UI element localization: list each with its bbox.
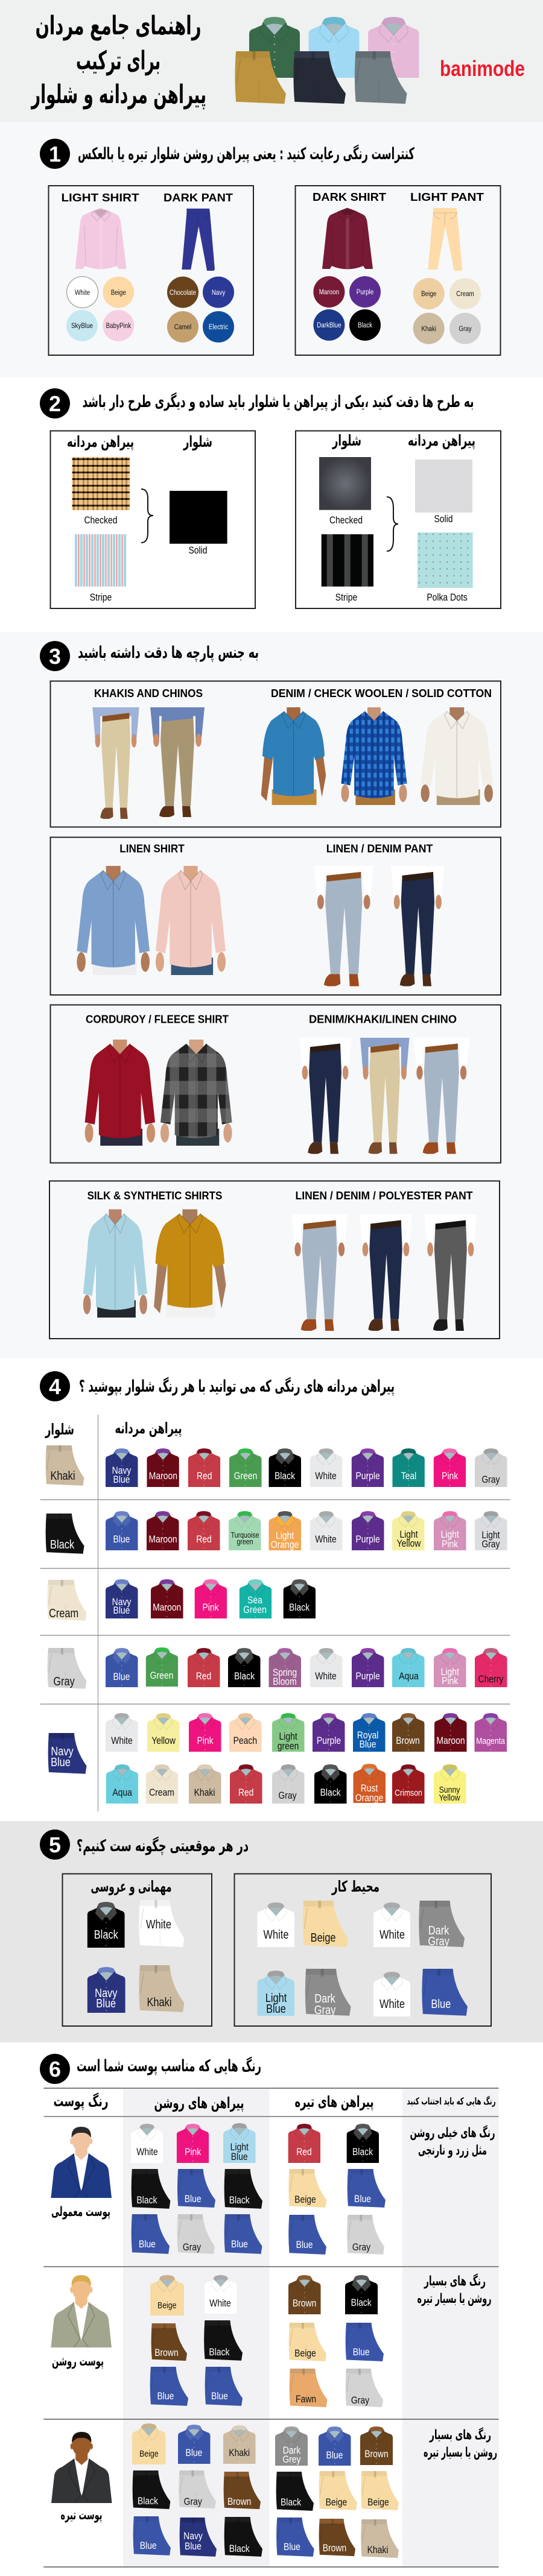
row: khaki: Purple bbox=[355, 1471, 380, 1482]
step 5 heading: 5 bbox=[49, 1833, 61, 1857]
swatch: solid: Solid bbox=[189, 545, 207, 556]
label: normal skin: پوست معمولی bbox=[51, 2205, 110, 2220]
row: black: Blue bbox=[113, 1534, 130, 1545]
dark shirt options: Blue bbox=[353, 2347, 370, 2358]
swatches: light pant colors: Beige bbox=[421, 290, 436, 298]
dark shirt options bbox=[288, 2124, 386, 2255]
panel: workplace bbox=[234, 1874, 491, 2026]
photo: light blue silk shirt bbox=[83, 1210, 147, 1318]
colors to avoid: مثل زرد و نارنجی bbox=[418, 2143, 487, 2158]
photo: gray check shirt bbox=[160, 1040, 232, 1146]
row: black: Red bbox=[196, 1534, 212, 1545]
label: pant: شلوار bbox=[332, 432, 361, 450]
row: gray: Purple bbox=[355, 1671, 380, 1682]
row: khaki: Gray bbox=[481, 1474, 500, 1485]
photo: chino pants bbox=[150, 707, 205, 818]
row: gray: Cherry bbox=[478, 1674, 504, 1685]
row: navy blue: Khaki bbox=[194, 1787, 215, 1798]
step 3 heading bbox=[40, 641, 259, 671]
photo: linen pant bbox=[314, 866, 373, 987]
outfit: white shirt blue pant: White bbox=[379, 1997, 405, 2010]
row: black bbox=[46, 1511, 507, 1554]
label: linen denim polyester: LINEN / DENIM / POLYESTER PANT bbox=[296, 1190, 473, 1202]
panel: khakis and denim bbox=[51, 681, 501, 827]
icon: pink shirt bbox=[75, 208, 127, 270]
row: dark skin bbox=[51, 2423, 497, 2558]
light shirt options: Blue bbox=[231, 2151, 248, 2162]
row: black: Pink bbox=[442, 1539, 458, 1550]
column heading: shirt: پیراهن مردانه bbox=[115, 1419, 182, 1438]
title bbox=[31, 11, 206, 110]
step 4 heading bbox=[40, 1371, 395, 1401]
row: khaki: Blue bbox=[113, 1474, 130, 1485]
panel: linen bbox=[51, 837, 501, 995]
chart: shirt and pant pairing table bbox=[40, 1415, 510, 1811]
row: gray: Gray bbox=[53, 1674, 75, 1688]
row: navy blue: Peach bbox=[233, 1735, 257, 1746]
outfit: white shirt beige pant: Beige bbox=[311, 1930, 336, 1944]
photo: gold silk shirt bbox=[154, 1210, 226, 1318]
brace bbox=[387, 497, 398, 551]
row: black: Orange bbox=[271, 1539, 299, 1550]
photo: white shirt bbox=[421, 707, 493, 805]
light shirt options: Blue bbox=[185, 2541, 202, 2552]
step 5 heading: در هر موقعیتی چگونه ست کنیم؟ bbox=[77, 1836, 249, 1855]
dark shirt options: Blue bbox=[326, 2450, 343, 2461]
light shirt options: Beige bbox=[157, 2300, 177, 2310]
step 4 heading: 4 bbox=[49, 1374, 61, 1399]
label: light shirt: LIGHT SHIRT bbox=[62, 192, 139, 204]
colors to avoid bbox=[424, 2426, 497, 2460]
row: navy blue: Red bbox=[238, 1787, 253, 1798]
column heading: colors to avoid: رنگ هایی که باید اجتناب کنید bbox=[407, 2095, 496, 2107]
swatches: light pant colors: Gray bbox=[459, 325, 472, 333]
logo: banimode: banimode bbox=[440, 56, 525, 81]
row: navy blue: Orange bbox=[355, 1793, 383, 1804]
outfit: white shirt blue pant: Blue bbox=[431, 1997, 451, 2010]
row: gray: White bbox=[315, 1671, 337, 1682]
row: khaki: Black bbox=[275, 1471, 295, 1482]
label: silk: SILK & SYNTHETIC SHIRTS bbox=[87, 1190, 222, 1202]
row: navy blue: Gray bbox=[278, 1790, 297, 1801]
row: navy blue: Crimson bbox=[395, 1788, 422, 1798]
person: dark skin bbox=[51, 2432, 112, 2503]
outfit: white shirt blue pant bbox=[373, 1969, 468, 2016]
row: navy blue: Rust bbox=[361, 1783, 378, 1794]
photo: blue linen shirt bbox=[77, 866, 150, 975]
step 6 heading bbox=[40, 2054, 261, 2084]
row: navy blue: Maroon bbox=[436, 1735, 465, 1746]
panel: light shirt dark pant bbox=[48, 186, 253, 355]
row: normal skin bbox=[51, 2123, 495, 2255]
dark shirt options: Blue bbox=[354, 2194, 371, 2205]
photo: denim pant bbox=[360, 1214, 412, 1331]
swatch: checked bbox=[72, 457, 130, 526]
photo: check shirt bbox=[341, 707, 407, 805]
photo: linen chino bbox=[413, 1038, 469, 1154]
row: black: Gray bbox=[481, 1539, 500, 1550]
row: navy blue: Sunny bbox=[439, 1785, 460, 1795]
light shirt options: Black bbox=[138, 2496, 158, 2507]
row: black: green bbox=[237, 1537, 253, 1546]
outfit: white shirt dark gray pant: Gray bbox=[428, 1934, 450, 1948]
row: black: Black bbox=[50, 1537, 75, 1551]
swatch: stripe bbox=[75, 534, 127, 603]
row: black: White bbox=[315, 1534, 337, 1545]
swatches: dark shirt colors: Purple bbox=[357, 288, 373, 296]
panel: patterned shirt solid pant bbox=[51, 431, 255, 608]
dark shirt options: Brown bbox=[293, 2298, 316, 2309]
row: khaki bbox=[46, 1445, 507, 1487]
section background: skin tone bbox=[0, 2042, 543, 2576]
dark shirt options: Beige bbox=[326, 2497, 347, 2508]
row: gray: Red bbox=[196, 1671, 211, 1682]
row: khaki: Khaki bbox=[51, 1468, 75, 1482]
title: پیراهن مردانه و شلوار bbox=[31, 80, 206, 110]
step 2 heading bbox=[40, 388, 474, 418]
row: gray: Aqua bbox=[399, 1671, 419, 1682]
step 3 heading: به جنس پارچه ها دقت داشته باشید bbox=[78, 643, 259, 662]
colors to avoid bbox=[410, 2124, 495, 2158]
section background: header bbox=[0, 0, 543, 122]
label: dark skin: پوست تیره bbox=[60, 2508, 103, 2523]
row: black: Light bbox=[276, 1530, 294, 1541]
row: cream: Maroon bbox=[153, 1602, 181, 1613]
row: navy blue: Royal bbox=[357, 1730, 378, 1741]
light shirt options: White bbox=[209, 2298, 231, 2309]
outfit: white shirt beige pant bbox=[257, 1901, 348, 1947]
section background: fabric bbox=[0, 632, 543, 1358]
label: party: مهمانی و عروسی bbox=[91, 1878, 171, 1896]
row: cream: Sea bbox=[247, 1595, 262, 1606]
dark shirt options: Khaki bbox=[367, 2545, 388, 2555]
dark shirt options: Brown bbox=[364, 2449, 389, 2460]
row: khaki: Navy bbox=[112, 1465, 132, 1476]
title: راهنمای جامع مردان bbox=[35, 11, 202, 41]
light shirt options: Gray bbox=[183, 2242, 201, 2253]
swatch: dark checked: Checked bbox=[329, 515, 363, 526]
step 6 heading: رنگ هایی که مناسب پوست شما است bbox=[77, 2056, 261, 2076]
light shirt options: Blue bbox=[231, 2239, 248, 2250]
light shirt options bbox=[132, 2423, 262, 2557]
light shirt options: Light bbox=[230, 2142, 249, 2153]
swatches: dark pant colors: Navy bbox=[212, 289, 226, 297]
dark shirt options bbox=[288, 2275, 384, 2407]
photo: pink linen shirt bbox=[156, 866, 226, 975]
colors to avoid bbox=[418, 2273, 491, 2306]
step 1 heading: 1 bbox=[49, 142, 61, 166]
header garments illustration bbox=[235, 17, 419, 104]
label: denim khaki linen: DENIM/KHAKI/LINEN CHINO bbox=[309, 1013, 457, 1025]
swatch: dark stripe: Stripe bbox=[335, 592, 357, 603]
step 6 heading: 6 bbox=[49, 2057, 61, 2082]
row: gray: Green bbox=[150, 1670, 173, 1681]
outfit: light blue shirt dark gray pant: Gray bbox=[314, 2003, 336, 2016]
swatch: solid gray bbox=[415, 459, 472, 525]
dark shirt options: Black bbox=[352, 2147, 373, 2158]
label: light pant: LIGHT PANT bbox=[410, 191, 484, 203]
light shirt options: Black bbox=[229, 2195, 250, 2206]
outfit: black shirt white pant bbox=[87, 1900, 184, 1948]
row: navy blue: Yellow bbox=[439, 1793, 460, 1802]
label: pant: شلوار bbox=[183, 433, 212, 451]
swatch: checked: Checked bbox=[84, 515, 117, 526]
swatch: stripe: Stripe bbox=[90, 592, 112, 603]
row: cream: Pink bbox=[202, 1602, 219, 1613]
outfit: light blue shirt dark gray pant: Light bbox=[265, 1990, 287, 2004]
row: cream: Green bbox=[243, 1605, 267, 1615]
dark shirt options: Beige bbox=[294, 2194, 316, 2205]
light shirt options: Beige bbox=[139, 2449, 159, 2458]
outfit: white shirt dark gray pant: White bbox=[379, 1927, 405, 1941]
person: normal skin bbox=[51, 2127, 112, 2198]
row: black: Light bbox=[399, 1529, 418, 1540]
dark shirt options: Fawn bbox=[296, 2394, 316, 2405]
row: navy blue bbox=[48, 1713, 507, 1804]
light shirt options: Brown bbox=[227, 2496, 251, 2507]
outfit: white shirt dark gray pant bbox=[373, 1901, 465, 1948]
colors to avoid: رنگ های بسیار bbox=[424, 2273, 486, 2289]
light shirt options bbox=[150, 2275, 243, 2406]
dark shirt options: Black bbox=[351, 2297, 372, 2308]
light shirt options: Blue bbox=[211, 2391, 228, 2402]
photo: polyester pant bbox=[424, 1214, 477, 1331]
column heading: skin color: رنگ پوست bbox=[53, 2092, 109, 2110]
dark shirt options bbox=[275, 2426, 399, 2558]
dark shirt options: Red bbox=[296, 2147, 312, 2158]
dark shirt options: Gray bbox=[352, 2242, 370, 2253]
person: light skin bbox=[51, 2275, 112, 2347]
row: cream: Navy bbox=[112, 1597, 132, 1608]
swatches: light shirt colors: Beige bbox=[111, 289, 126, 297]
light shirt options: Blue bbox=[185, 2194, 202, 2205]
section background: patterns bbox=[0, 377, 543, 632]
outfit: light blue shirt dark gray pant bbox=[257, 1969, 351, 2016]
colors to avoid: رنگ های بسیار bbox=[429, 2426, 491, 2443]
column heading: light shirts: پیراهن های روشن bbox=[154, 2094, 244, 2112]
row: navy blue: Pink bbox=[197, 1735, 214, 1746]
row: navy blue: green bbox=[278, 1741, 299, 1752]
row: light skin bbox=[51, 2273, 491, 2407]
title: برای ترکیب bbox=[76, 46, 160, 76]
step 1 heading bbox=[40, 139, 414, 169]
swatches: light pant colors: Cream bbox=[456, 290, 474, 298]
step 3 heading: 3 bbox=[49, 644, 61, 669]
row: khaki: Maroon bbox=[149, 1471, 177, 1482]
dark shirt options: Blue bbox=[284, 2542, 300, 2552]
swatch: dark stripe bbox=[322, 534, 373, 603]
light shirt options: Pink bbox=[185, 2147, 201, 2158]
outfit: black shirt white pant: Black bbox=[94, 1927, 119, 1941]
row: cream: Cream bbox=[49, 1606, 78, 1620]
dark shirt options: Beige bbox=[367, 2497, 389, 2508]
row: navy blue: Magenta bbox=[476, 1736, 505, 1746]
swatches: light shirt colors: BabyPink bbox=[106, 322, 132, 330]
dark shirt options: Beige bbox=[294, 2348, 316, 2359]
outfit: navy shirt khaki pant: Blue bbox=[96, 1996, 116, 2010]
photo: linen pant bbox=[291, 1214, 348, 1331]
row: navy blue: Blue bbox=[360, 1739, 376, 1750]
row: black: Purple bbox=[355, 1534, 380, 1545]
swatches: light shirt colors bbox=[66, 277, 134, 341]
photo: khaki pants bbox=[92, 707, 139, 819]
photo: khaki chino bbox=[360, 1038, 409, 1154]
light shirt options: Blue bbox=[186, 2448, 202, 2458]
outfit: light blue shirt dark gray pant: Blue bbox=[266, 2001, 286, 2015]
column heading: dark shirts: پیراهن های تیره bbox=[294, 2093, 374, 2111]
row: cream: Blue bbox=[113, 1605, 130, 1616]
step 2 heading: 2 bbox=[49, 391, 61, 416]
row: cream: Black bbox=[289, 1602, 310, 1613]
photo: denim chino bbox=[299, 1038, 351, 1154]
row: black: Light bbox=[441, 1529, 459, 1540]
swatches: dark pant colors: Chocolate bbox=[170, 289, 196, 297]
step 5 heading bbox=[40, 1829, 249, 1860]
label: dark pant: DARK PANT bbox=[164, 192, 233, 204]
label: linen shirt: LINEN SHIRT bbox=[119, 843, 185, 855]
light shirt options: Gray bbox=[184, 2496, 202, 2507]
light shirt options: White bbox=[136, 2147, 158, 2158]
light shirt options: Black bbox=[229, 2543, 250, 2554]
row: gray: Spring bbox=[273, 1667, 297, 1678]
swatch: polka dots: Polka Dots bbox=[427, 592, 468, 603]
label: shirt: پیراهن مردانه bbox=[408, 432, 475, 450]
light shirt options: Black bbox=[136, 2195, 157, 2206]
row: khaki: Pink bbox=[442, 1471, 458, 1482]
row: gray bbox=[48, 1647, 507, 1689]
outfit: black shirt white pant: White bbox=[146, 1917, 171, 1931]
light shirt options: Blue bbox=[157, 2391, 174, 2402]
section background: occasions bbox=[0, 1821, 543, 2042]
row: navy blue: Blue bbox=[51, 1755, 71, 1769]
row: navy blue: Aqua bbox=[112, 1787, 132, 1798]
light shirt options: Black bbox=[209, 2347, 230, 2358]
swatch: solid gray: Solid bbox=[434, 514, 453, 525]
dark shirt options: Blue bbox=[296, 2240, 313, 2250]
swatches: dark shirt colors: Maroon bbox=[319, 288, 339, 296]
icon: beige pant bbox=[428, 208, 462, 271]
outfit: navy shirt khaki pant: Khaki bbox=[147, 1995, 171, 2009]
outfit: white shirt dark gray pant: Dark bbox=[428, 1923, 449, 1937]
colors to avoid: روشن یا بسیار تیره bbox=[418, 2291, 491, 2306]
row: gray: Light bbox=[441, 1667, 459, 1678]
label: dark shirt: DARK SHIRT bbox=[313, 191, 386, 203]
label: denim check cotton: DENIM / CHECK WOOLEN / SOLID COTTON bbox=[271, 687, 492, 699]
panel: patterned pant solid shirt bbox=[296, 431, 501, 608]
row: khaki: White bbox=[315, 1471, 337, 1482]
section background: color pairing bbox=[0, 1358, 543, 1821]
light shirt options: Blue bbox=[140, 2540, 157, 2551]
row: black: Turquoise bbox=[231, 1530, 259, 1539]
row: navy blue: Yellow bbox=[151, 1735, 176, 1746]
swatches: dark pant colors bbox=[167, 277, 234, 343]
label: light skin: پوست روشن bbox=[52, 2354, 104, 2369]
label: khakis: KHAKIS AND CHINOS bbox=[94, 687, 203, 699]
row: navy blue: White bbox=[111, 1735, 133, 1746]
row: black: Yellow bbox=[397, 1538, 421, 1549]
row: gray: Pink bbox=[442, 1676, 458, 1687]
light shirt options: Navy bbox=[183, 2531, 203, 2542]
panel: silk synthetic bbox=[49, 1181, 500, 1339]
light shirt options: Khaki bbox=[229, 2448, 250, 2458]
photo: denim shirt bbox=[261, 707, 326, 805]
photo: red shirt bbox=[85, 1040, 155, 1146]
swatches: dark shirt colors bbox=[313, 276, 381, 341]
outfit: navy shirt khaki pant bbox=[87, 1965, 184, 2013]
swatches: dark shirt colors: Black bbox=[358, 321, 373, 329]
column heading: pant: شلوار bbox=[45, 1421, 74, 1439]
label: shirt: پیراهن مردانه bbox=[67, 433, 134, 451]
row: navy blue: Black bbox=[320, 1787, 341, 1798]
row: khaki: Red bbox=[197, 1471, 212, 1482]
row: gray: Black bbox=[234, 1671, 255, 1682]
dark shirt options: Dark bbox=[283, 2445, 300, 2456]
swatches: dark pant colors: Electric bbox=[209, 323, 229, 331]
row: black: Maroon bbox=[148, 1534, 177, 1545]
label: corduroy: CORDUROY / FLEECE SHIRT bbox=[86, 1013, 229, 1025]
icon: blue pant bbox=[182, 209, 215, 271]
light shirt options bbox=[131, 2123, 262, 2254]
panel: party and wedding bbox=[63, 1874, 212, 2026]
row: gray: Blue bbox=[113, 1672, 130, 1682]
swatch: dark checked bbox=[319, 457, 371, 526]
swatches: light pant colors: Khaki bbox=[421, 325, 436, 333]
row: khaki: Teal bbox=[401, 1471, 416, 1482]
table: skin tone colors bbox=[43, 2088, 499, 2567]
label: linen denim pant: LINEN / DENIM PANT bbox=[326, 843, 433, 855]
swatches: light pant colors bbox=[413, 278, 481, 344]
panel: dark shirt light pant bbox=[296, 186, 501, 355]
outfit: light blue shirt dark gray pant: Dark bbox=[314, 1991, 336, 2005]
row: navy blue: Cream bbox=[149, 1787, 174, 1798]
row: navy blue: Light bbox=[279, 1731, 297, 1742]
swatches: dark pant colors: Camel bbox=[174, 323, 191, 331]
row: navy blue: Brown bbox=[396, 1735, 420, 1746]
dark shirt options: Grey bbox=[282, 2454, 301, 2465]
row: navy blue: Purple bbox=[317, 1735, 341, 1746]
dark shirt options: Gray bbox=[351, 2395, 369, 2406]
light shirt options: Brown bbox=[154, 2347, 179, 2358]
row: cream bbox=[48, 1579, 316, 1621]
dark shirt options: Brown bbox=[323, 2543, 346, 2554]
swatches: light shirt colors: White bbox=[75, 289, 90, 297]
section background: contrast bbox=[0, 122, 543, 377]
row: gray: Bloom bbox=[273, 1676, 297, 1687]
row: khaki: Green bbox=[234, 1471, 257, 1482]
panel: corduroy fleece bbox=[51, 1005, 501, 1163]
swatch: solid bbox=[170, 491, 227, 556]
swatches: light shirt colors: SkyBlue bbox=[71, 322, 93, 330]
outfit: white shirt beige pant: White bbox=[264, 1927, 288, 1941]
icon: maroon shirt bbox=[322, 208, 373, 270]
light shirt options: Blue bbox=[139, 2239, 156, 2250]
label: workplace: محیط کار bbox=[331, 1878, 379, 1895]
outfit: navy shirt khaki pant: Navy bbox=[95, 1986, 118, 2000]
swatch: polka dots bbox=[418, 532, 473, 603]
photo: denim pant bbox=[391, 866, 445, 987]
row: navy blue: Navy bbox=[51, 1744, 74, 1758]
swatches: dark shirt colors: DarkBlue bbox=[317, 321, 341, 329]
brace bbox=[141, 489, 153, 543]
dark shirt options: Black bbox=[281, 2497, 301, 2508]
row: black: Light bbox=[481, 1530, 500, 1541]
